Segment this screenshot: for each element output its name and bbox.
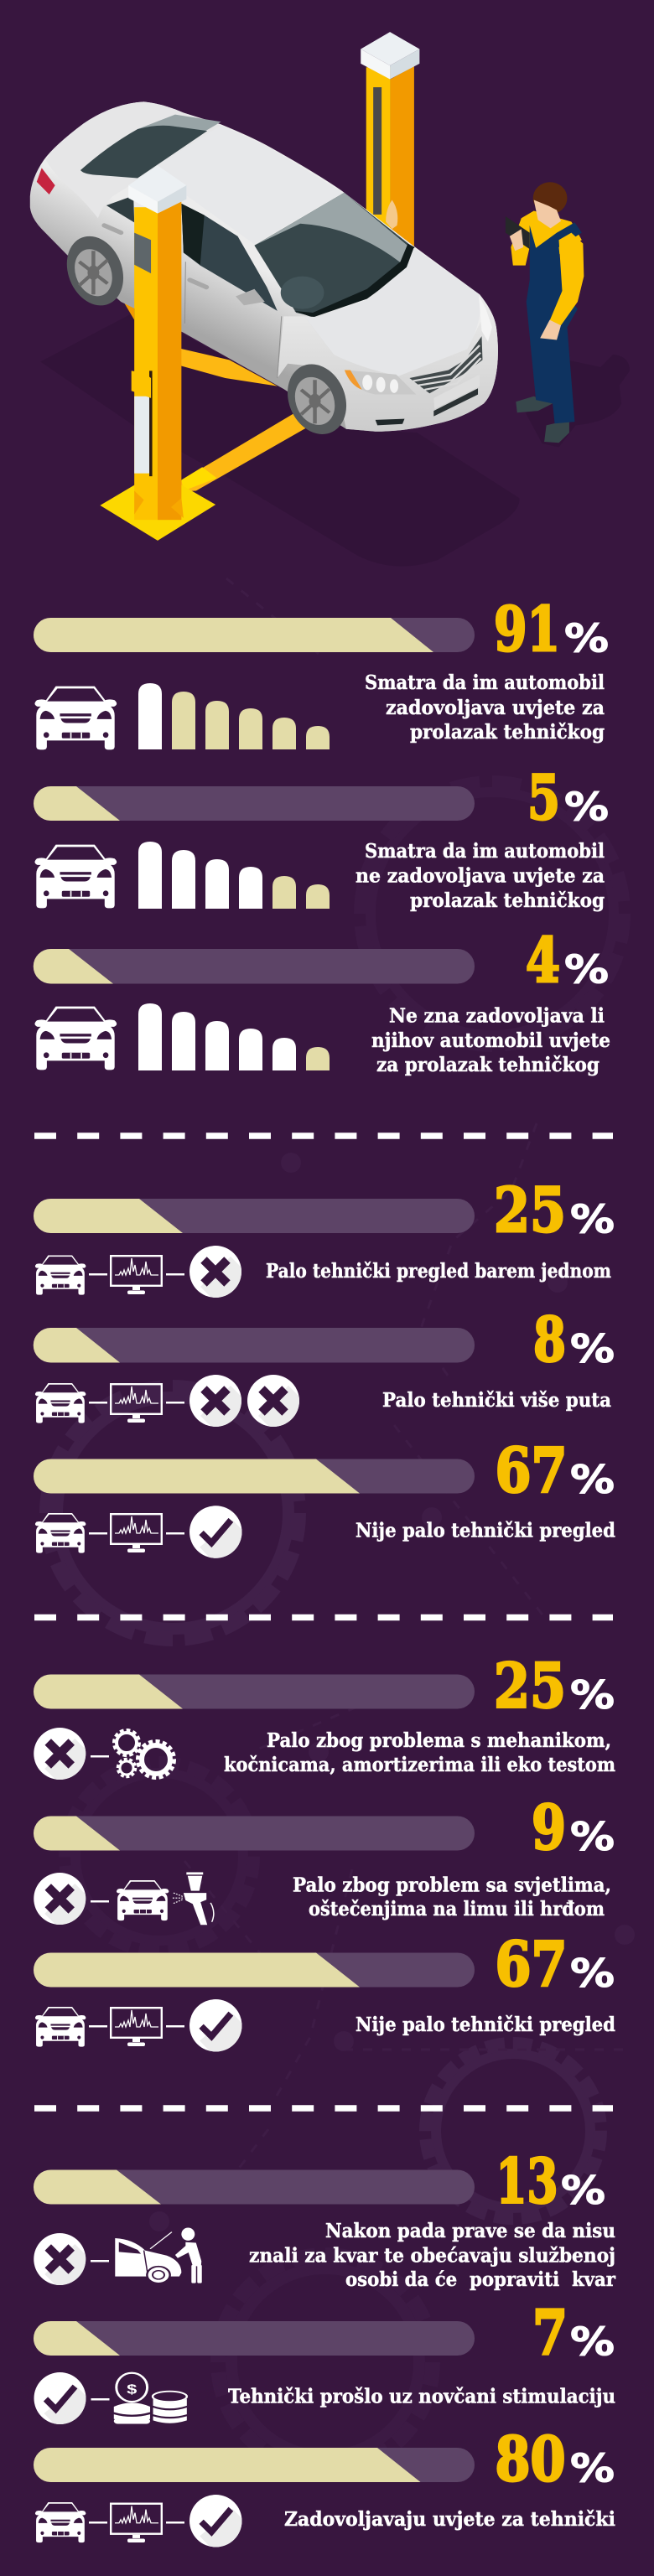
- row 67% did not fail: Nije palo tehnički pregled: [356, 1519, 615, 1542]
- row 25% mechanics: Palo zbog problema s mehanikom,: [267, 1729, 611, 1752]
- row 9% lights and body: 9: [532, 1792, 566, 1864]
- row 25% mechanics: kočnicama, amortizerima ili eko testom: [224, 1754, 615, 1776]
- row 5%: 5: [527, 762, 560, 834]
- row 7%: %: [570, 2319, 615, 2364]
- icon: spray gun: [173, 1872, 214, 1925]
- row 4%: [34, 925, 610, 1076]
- near lift post: [100, 165, 215, 541]
- row 5%: [34, 762, 609, 912]
- row 25% mechanics: [34, 1650, 615, 1787]
- divider 2: [34, 1615, 613, 1620]
- row 25% mechanics: %: [570, 1672, 615, 1718]
- divider 1: [34, 1133, 613, 1139]
- headlight: [345, 371, 416, 395]
- row 25% failed once: [34, 1174, 615, 1305]
- car: [30, 101, 498, 440]
- divider 3: [34, 2105, 613, 2112]
- row 7%: Tehnički prošlo uz novčani stimulaciju: [228, 2386, 615, 2408]
- row 4%: 4: [526, 925, 560, 997]
- row 67% did not fail: [34, 1928, 615, 2060]
- row 91%: [34, 593, 609, 749]
- icon: coins: [114, 2373, 187, 2423]
- row 7%: 7: [532, 2297, 568, 2369]
- row 91%: %: [564, 615, 609, 661]
- front wheel: [279, 359, 355, 440]
- row 5%: ne zadovoljava uvjete za: [356, 865, 605, 887]
- row 8% failed multiple: %: [570, 1326, 615, 1371]
- row 9% lights and body: [34, 1792, 615, 1932]
- row 13%: Nakon pada prave se da nisu: [325, 2220, 615, 2242]
- row 67% did not fail: %: [570, 1951, 615, 1996]
- row 13%: %: [561, 2168, 605, 2213]
- row 8% failed multiple: 8: [533, 1304, 566, 1376]
- row 67% did not fail: 67: [495, 1435, 567, 1507]
- row 80%: [34, 2423, 615, 2555]
- row 91%: zadovoljava uvjete za: [386, 697, 605, 719]
- row 9% lights and body: oštečenjima na limu ili hrđom: [309, 1898, 605, 1920]
- row 13%: [34, 2146, 616, 2293]
- row 8% failed multiple: Palo tehnički više puta: [382, 1389, 611, 1412]
- row 5%: %: [564, 785, 609, 830]
- row 25% mechanics: 25: [494, 1650, 566, 1722]
- row 4%: %: [564, 947, 609, 993]
- far lift post: [361, 32, 419, 249]
- row 7%: [34, 2297, 615, 2432]
- row 13%: 13: [496, 2146, 558, 2218]
- panel: section 3 failure reasons: [34, 1650, 615, 2060]
- icon: gears: [114, 1730, 174, 1777]
- row 67% did not fail: %: [570, 1457, 615, 1502]
- row 25% failed once: 25: [494, 1174, 566, 1247]
- row 25% failed once: %: [570, 1197, 615, 1242]
- row 91%: 91: [494, 593, 560, 666]
- row 91%: Smatra da im automobil: [365, 671, 605, 694]
- icon: coins: $: [127, 2382, 138, 2397]
- hero illustration: car on lift with mechanic: [30, 32, 630, 567]
- background gears and dashed lines: [47, 578, 635, 2470]
- panel: section 1 vehicle condition: [34, 593, 610, 1076]
- icon: mechanic at car: [115, 2228, 202, 2284]
- row 4%: njihov automobil uvjete: [371, 1029, 610, 1052]
- mechanic: [506, 182, 584, 443]
- row 80%: Zadovoljavaju uvjete za tehnički: [284, 2508, 615, 2531]
- row 9% lights and body: %: [570, 1814, 615, 1859]
- lift arms: [122, 299, 309, 491]
- row 80%: 80: [495, 2423, 565, 2496]
- floor shadows: [40, 313, 630, 567]
- row 8% failed multiple: [34, 1304, 615, 1434]
- row 80%: %: [570, 2446, 615, 2491]
- row 5%: Smatra da im automobil: [365, 840, 605, 863]
- panel: section 4 after failure: [34, 2146, 616, 2555]
- row 91%: prolazak tehničkog: [410, 721, 605, 744]
- row 67% did not fail: Nije palo tehnički pregled: [356, 2014, 615, 2036]
- panel: section 2 failed inspection: [34, 1174, 615, 1566]
- rear wheel: [59, 231, 132, 311]
- row 9% lights and body: Palo zbog problem sa svjetlima,: [293, 1874, 611, 1896]
- row 25% failed once: Palo tehnički pregled barem jednom: [266, 1260, 611, 1283]
- row 67% did not fail: [34, 1435, 615, 1566]
- row 4%: za prolazak tehničkog: [376, 1054, 600, 1076]
- row 5%: prolazak tehničkog: [410, 889, 605, 912]
- row 13%: osobi da će popraviti kvar: [345, 2268, 616, 2291]
- row 13%: znali za kvar te obećavaju službenoj: [249, 2245, 615, 2267]
- grille and plate: [376, 336, 482, 425]
- row 67% did not fail: 67: [495, 1928, 567, 2000]
- row 4%: Ne zna zadovoljava li: [389, 1004, 605, 1028]
